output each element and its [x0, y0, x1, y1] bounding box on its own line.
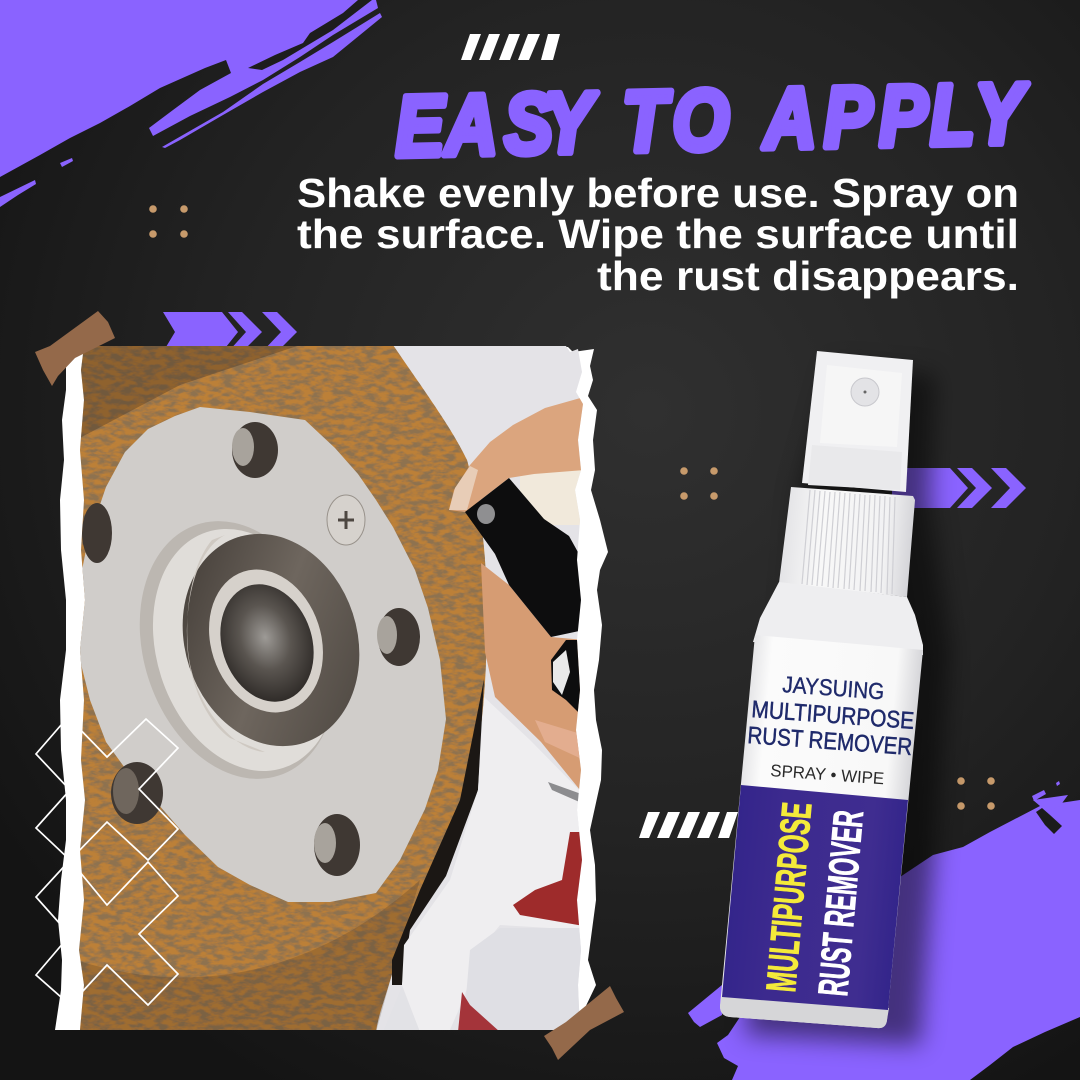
description text: the rust disappears.: [597, 253, 1019, 299]
chrome part: [551, 640, 580, 712]
description text: [297, 170, 1019, 299]
slashes: top: [461, 34, 560, 60]
bottle body: [720, 635, 923, 1028]
bolts: [82, 422, 420, 876]
slashes: lower middle: [639, 812, 738, 838]
hub inner ring: [209, 570, 323, 712]
dark shadow crescent: [392, 679, 484, 985]
clear over-cap: [802, 351, 913, 492]
nozzle orifice: [477, 504, 495, 524]
rust disc: [76, 345, 487, 1032]
red strip: [458, 992, 500, 1032]
dots: lower right: [957, 777, 995, 810]
label: vertical white: RUST REMOVER: [809, 808, 872, 998]
cleaned metal patch: [78, 407, 446, 902]
hand: lower palm: [481, 563, 584, 795]
sprayer nozzle: [465, 478, 584, 637]
rust shading: lower band: [76, 880, 420, 1032]
dots: top left: [149, 205, 188, 238]
bolt threads: [113, 428, 397, 863]
hub inner bore: [220, 584, 314, 702]
hub rim highlight: [153, 529, 324, 771]
label: product name: MULTIPURPOSE: [751, 696, 915, 735]
purple label: [722, 785, 908, 1010]
label: rust remover: RUST REMOVER: [747, 722, 913, 761]
tape: top left: [35, 311, 115, 386]
label: vertical yellow: MULTIPURPOSE: [757, 800, 821, 994]
description text: the surface. Wipe the surface until: [297, 211, 1019, 257]
cream backdrop: [520, 470, 581, 525]
grey strip: [548, 782, 579, 802]
heading: EASY TO APPLY: [394, 65, 1031, 174]
arrow: beside bottle: [892, 468, 1026, 508]
hand: lower finger nail: [535, 720, 580, 758]
photo: rusty brake disc and spray: [76, 345, 584, 1032]
hand: nail: [449, 466, 478, 510]
hand: upper finger: [449, 397, 584, 512]
nozzle: [820, 365, 902, 447]
spray bottle: [720, 351, 950, 1045]
screw: [327, 495, 365, 545]
arrow: above photo: [163, 312, 297, 352]
collar: [808, 445, 902, 490]
tape: bottom right: [544, 986, 624, 1060]
shoulder: [753, 582, 923, 655]
hub outer rim: [140, 521, 324, 779]
dots: middle right: [680, 467, 718, 500]
bottle shadow: [745, 365, 950, 1045]
grey lower area: [467, 928, 581, 1004]
brush stroke: bottom right: [688, 781, 1080, 1080]
ribbed cap: [779, 487, 915, 597]
diamond outlines: [36, 717, 178, 1005]
lower grey band: [720, 995, 889, 1028]
label: brand: JAYSUING: [782, 671, 885, 704]
brush stroke: top left: [0, 0, 382, 207]
lower base corner: [383, 987, 420, 1032]
label: usage: SPRAY • WIPE: [770, 761, 885, 788]
rust shading: upper left: [76, 345, 300, 440]
hub cup: [182, 534, 360, 746]
description text: Shake evenly before use. Spray on: [297, 170, 1019, 216]
white guard: [402, 697, 584, 1032]
red part: [513, 832, 584, 926]
torn photo frame: [55, 347, 608, 1030]
